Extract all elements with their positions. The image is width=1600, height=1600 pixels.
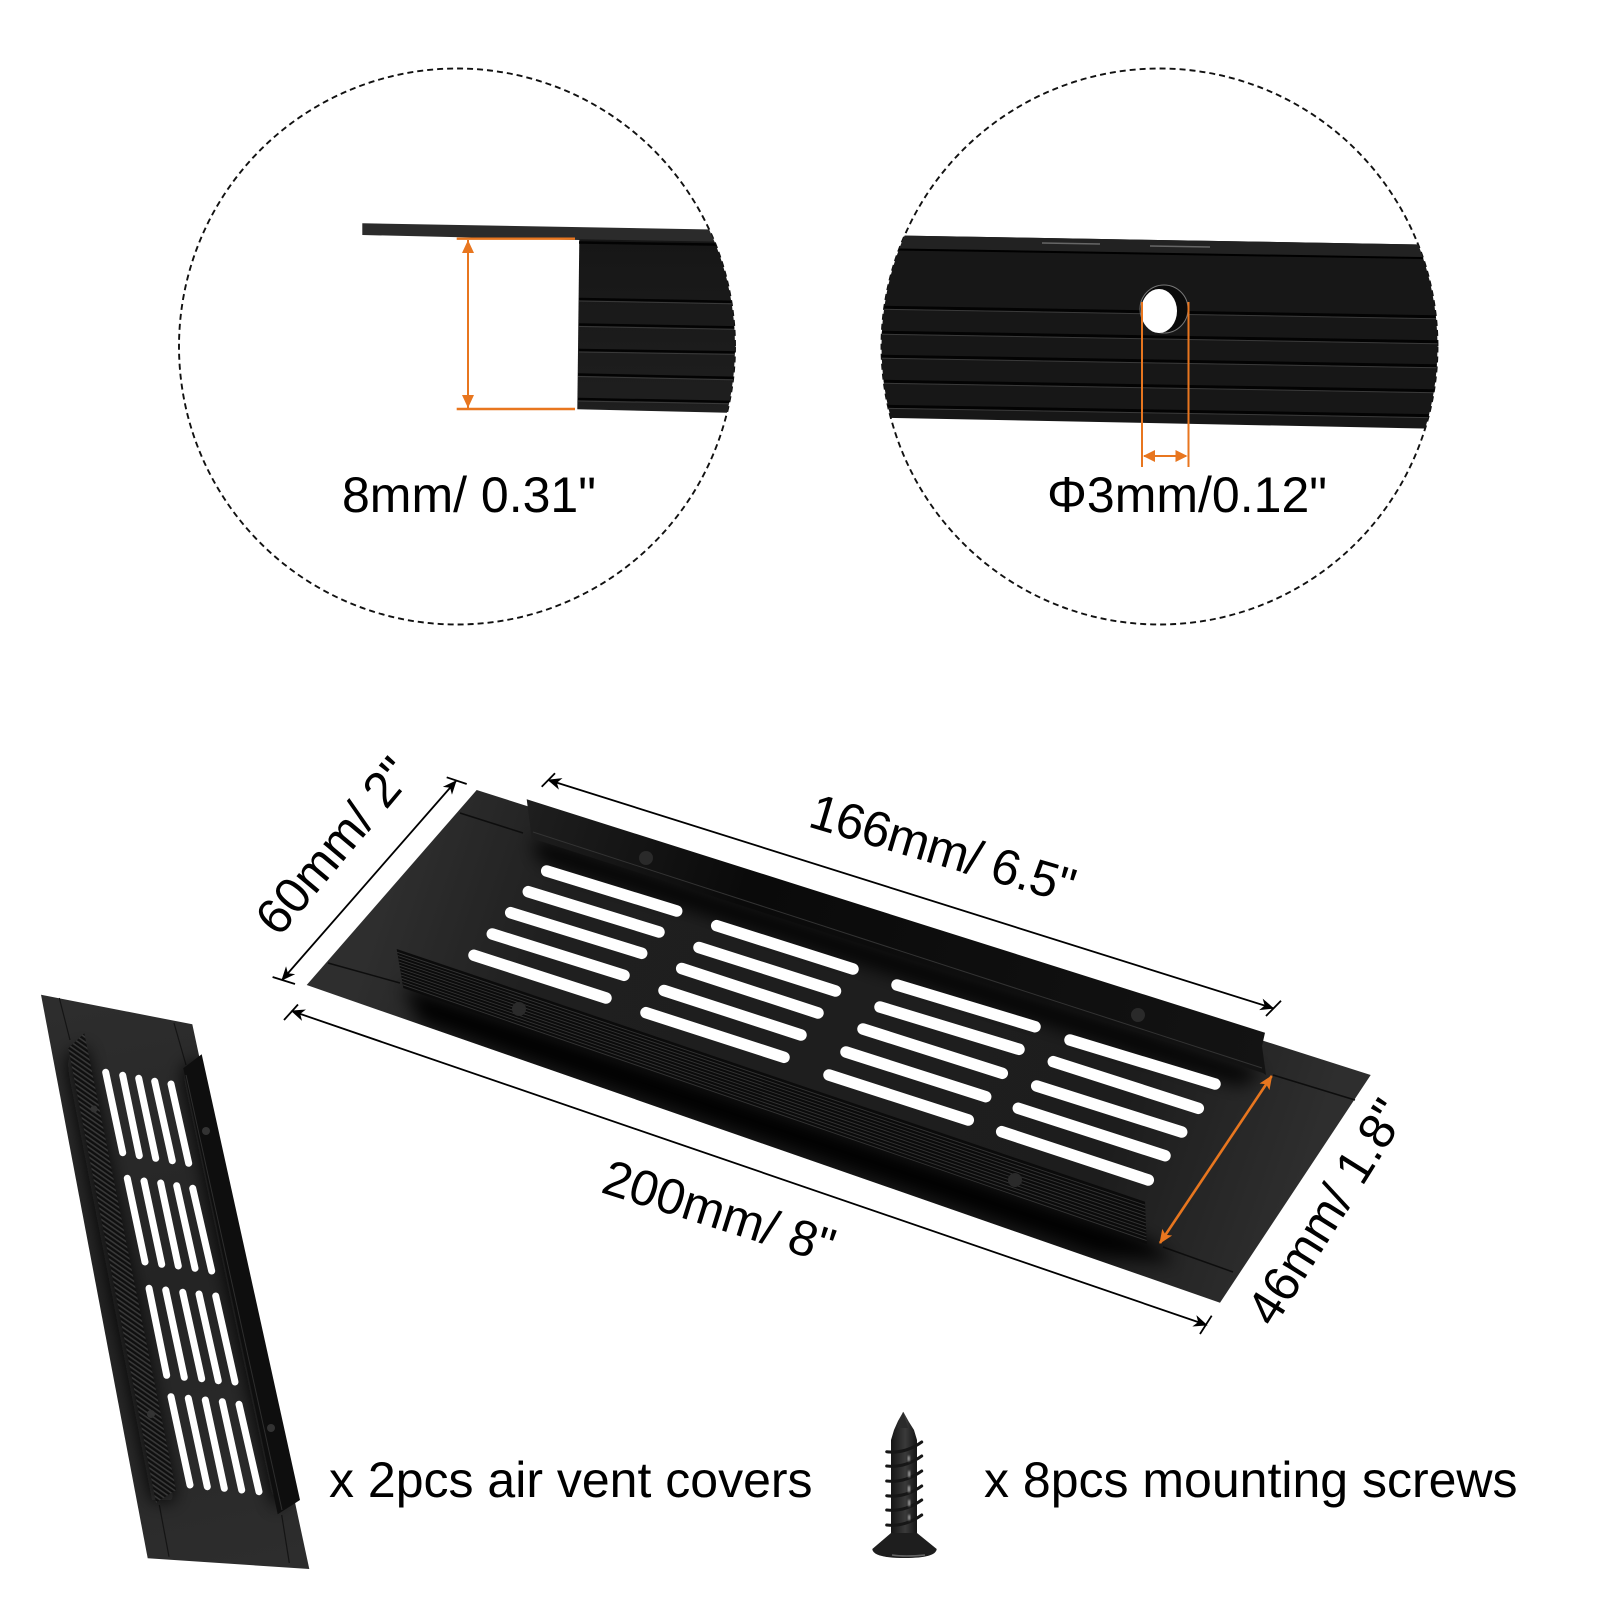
orange height dimension xyxy=(457,239,575,409)
vent slots xyxy=(474,871,1215,1180)
vent slots xyxy=(106,1072,259,1492)
dashed detail circle right xyxy=(882,68,1438,624)
label: 8mm: 8mm/ 0.31" xyxy=(342,467,596,523)
label: vent cover quantity: x 2pcs air vent covers xyxy=(329,1452,813,1508)
screw holes xyxy=(512,851,1145,1187)
label: 200mm: 200mm/ 8" xyxy=(596,1149,842,1275)
dimension: 60mm xyxy=(273,777,467,984)
mesh flange xyxy=(68,1033,176,1503)
back flange xyxy=(527,799,1266,1075)
panel: hole diameter detail xyxy=(870,68,1450,624)
label: 60mm: 60mm/ 2" xyxy=(244,747,424,945)
profile cross-section xyxy=(362,223,740,413)
profile strip with hole xyxy=(870,235,1450,429)
label: screw quantity: x 8pcs mounting screws xyxy=(984,1452,1518,1508)
main vent cover xyxy=(307,790,1371,1303)
orange diameter dimension xyxy=(1142,302,1188,467)
right flange xyxy=(183,1054,300,1514)
icon: second vent cover xyxy=(41,995,309,1569)
icon: mounting screw xyxy=(872,1412,937,1558)
front ribbed flange xyxy=(397,949,1147,1244)
flange screw holes xyxy=(90,1106,275,1432)
dimension: 166mm xyxy=(542,773,1281,1016)
panel: main vent with dimensions xyxy=(244,747,1418,1335)
label: 166mm: 166mm/ 6.5" xyxy=(804,783,1082,914)
panel: profile height detail xyxy=(179,68,740,624)
label: 3mm hole: Φ3mm/0.12" xyxy=(1047,467,1327,523)
label: 46mm: 46mm/ 1.8" xyxy=(1236,1089,1418,1335)
dimension: 200mm xyxy=(284,1004,1212,1334)
dashed detail circle left xyxy=(179,68,735,624)
dimension: 46mm orange xyxy=(1160,1076,1272,1243)
